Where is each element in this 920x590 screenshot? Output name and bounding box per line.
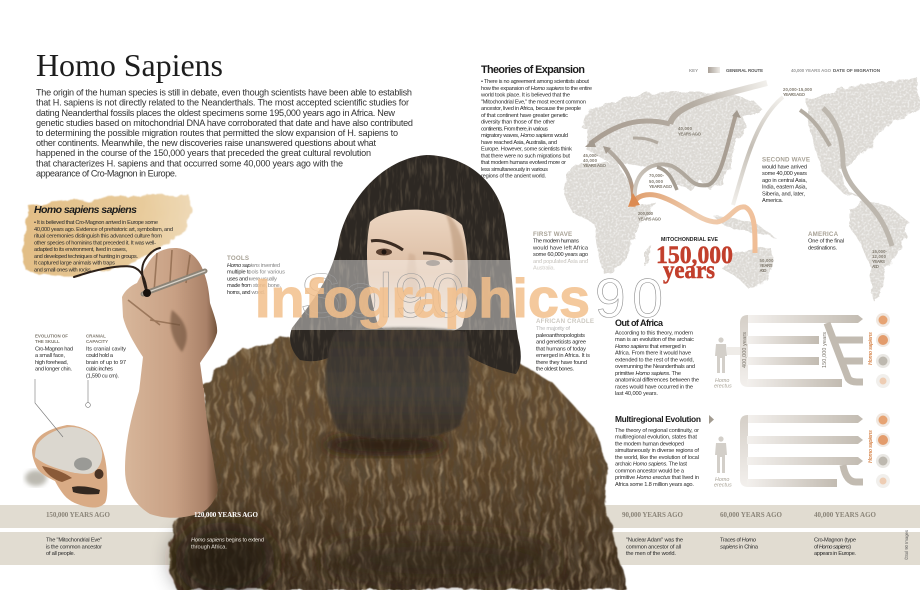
text: evolution of the skull: and longer chin. bbox=[35, 367, 72, 373]
text: african cradle: that humans of today bbox=[536, 346, 586, 352]
text: theories of expansion: continents. From there, in various bbox=[481, 126, 548, 132]
text: theories of expansion: world took place. It is believed that the bbox=[480, 92, 570, 98]
intro text: to determining the possible migration routes that permitted the slow expansion of H. sapiens to bbox=[36, 128, 398, 138]
intro text bbox=[36, 88, 413, 178]
callout: mitochondrial eve: 150,000 bbox=[656, 242, 733, 269]
text: second wave: America. bbox=[762, 198, 783, 204]
panel: homo sapiens sapiens: Homo sapiens sapiens bbox=[34, 204, 137, 216]
hand bbox=[122, 248, 217, 392]
timeline: is the common ancestor bbox=[46, 544, 102, 550]
text: tools: TOOLS bbox=[227, 255, 249, 262]
intro text: that characterizes H. sapiens and that occurred some 40,000 years ago with the bbox=[36, 158, 343, 168]
forearm bbox=[125, 388, 218, 518]
eyes and brows bbox=[371, 240, 452, 297]
text: cranial capacity: Its cranial cavity bbox=[86, 346, 126, 352]
map date labels: AGO bbox=[760, 268, 767, 273]
text: first wave bbox=[532, 231, 589, 272]
text: theories of expansion: migratory waves, Homo sapiens would bbox=[481, 133, 568, 139]
illustration: skull bbox=[25, 425, 107, 508]
icon: arrow bbox=[709, 415, 714, 424]
text: cranial capacity bbox=[86, 334, 126, 380]
icon: homo erectus figure bbox=[715, 337, 727, 373]
text: cranial capacity: CAPACITY bbox=[86, 339, 108, 344]
text: out of africa: last 40,000 years. bbox=[615, 391, 658, 397]
text: tools bbox=[227, 255, 285, 296]
map continents bbox=[563, 77, 920, 300]
text: america: One of the final bbox=[808, 238, 844, 244]
text: america: AMERICA bbox=[808, 231, 839, 238]
map date labels: 200,000 bbox=[638, 211, 654, 216]
map date labels: 40,000 bbox=[583, 158, 598, 163]
map date labels: YEARS bbox=[872, 259, 885, 264]
text: theories of expansion: "Mitochondrial Eve," the most recent common bbox=[481, 99, 586, 105]
map date labels: 40,000 bbox=[678, 126, 693, 131]
text: america: destinations. bbox=[808, 245, 837, 251]
credit: ©Sol 90 Images bbox=[904, 530, 909, 560]
map date labels: YEARS AGO bbox=[783, 92, 806, 97]
text: second wave: ago in central Asia, bbox=[762, 178, 807, 184]
map key: GENERAL ROUTE bbox=[726, 68, 763, 73]
text: evolution of the skull bbox=[35, 334, 73, 373]
skull leader lines bbox=[35, 379, 90, 437]
text: out of africa: Africa. From there it would have bbox=[615, 351, 691, 357]
text: out of africa: Homo sapiens that emerged in bbox=[615, 344, 686, 350]
map key: KEY bbox=[689, 68, 698, 73]
text: second wave: some 40,000 years bbox=[762, 171, 807, 177]
heading: out of africa: Out of Africa bbox=[615, 318, 664, 328]
text: multiregional evolution: the modern human developed bbox=[615, 442, 684, 448]
text: tools: Homo sapiens invented bbox=[227, 263, 280, 269]
fur shadows bbox=[175, 434, 560, 590]
panel: homo sapiens sapiens: and small ones with rocks. bbox=[34, 267, 92, 273]
text: african cradle: paleoanthropologists bbox=[536, 333, 585, 339]
text: cranial capacity: (1,590 cu cm). bbox=[86, 374, 119, 380]
text: theories of expansion: that there were no such migrations but bbox=[481, 153, 570, 159]
intro text: The origin of the human species is still in debate, even though scientists have been able to establish bbox=[36, 88, 412, 98]
text: theories of expansion: of that continent have greater genetic bbox=[481, 113, 568, 119]
text: african cradle: and geneticists agree bbox=[536, 340, 586, 346]
timeline: 150,000 YEARS AGO bbox=[46, 511, 111, 519]
text: cranial capacity: cubic inches bbox=[86, 367, 113, 373]
timeline bbox=[46, 511, 877, 557]
timeline: sapiens in China bbox=[720, 544, 759, 550]
panel: homo sapiens sapiens: and developed techniques of hunting in groups. bbox=[34, 254, 138, 260]
timeline: of Homo sapiens) bbox=[814, 544, 851, 550]
timeline bands bbox=[0, 505, 920, 565]
intro text: other continents. Meanwhile, the new discoveries raise unanswered questions about what bbox=[36, 138, 376, 148]
text: multiregional evolution: simultaneously in diverse regions of bbox=[615, 448, 699, 454]
text: theories of expansion: how the expansion of Homo sapiens to the entire bbox=[481, 86, 592, 92]
intro text: that H. sapiens is not directly related to the Neanderthals. The most accepted scientific studies for bbox=[36, 98, 409, 108]
watermark: Sol90 bbox=[300, 262, 465, 331]
timeline: 60,000 YEARS AGO bbox=[720, 511, 783, 519]
timeline: The "Mitochondrial Eve" bbox=[46, 538, 102, 544]
timeline: 90,000 YEARS AGO bbox=[622, 511, 684, 519]
illustration: cro-magnon man bbox=[74, 155, 627, 590]
timeline: of all people. bbox=[46, 551, 75, 557]
intro text: appearance of Cro-Magnon in Europe. bbox=[36, 168, 177, 178]
text: african cradle: the oldest bones. bbox=[536, 366, 574, 372]
text: cranial capacity: brain of up to 97 bbox=[86, 360, 126, 366]
text: out of africa: man is an evolution of the archaic bbox=[615, 337, 694, 343]
map date labels: 15,000- bbox=[872, 249, 888, 254]
text: tools: uses and were usually bbox=[227, 276, 277, 282]
text: out of africa: primitive Homo sapiens. The bbox=[615, 371, 681, 377]
text: theories of expansion: diversity than those of the other bbox=[481, 120, 555, 126]
map date labels: AGO bbox=[872, 264, 880, 269]
text: second wave: would have arrived bbox=[761, 164, 807, 170]
timeline: appears in Europe. bbox=[814, 551, 856, 557]
panel: homo sapiens sapiens bbox=[24, 195, 191, 276]
text: first wave: some 60,000 years ago bbox=[533, 252, 588, 258]
text: tools: multiple tools for various bbox=[227, 270, 285, 276]
text: theories of expansion: • There is no agreement among scientists about bbox=[481, 79, 589, 85]
text: evolution of the skull: EVOLUTION OF bbox=[35, 334, 68, 338]
icon: world region globes bbox=[876, 413, 890, 488]
map date labels: 45,000- bbox=[583, 153, 599, 158]
heading: theories of expansion: Theories of Expansion bbox=[481, 64, 585, 76]
intro text: genetic studies based on mitochondrial DNA have corroborated that date and have also contributed bbox=[36, 118, 413, 128]
text: out of africa: races would have occurred in the bbox=[615, 384, 693, 390]
text: second wave: Siberia, and, later, bbox=[762, 192, 805, 198]
panel: homo sapiens sapiens: adapted to its environment, lived in caves, bbox=[34, 247, 127, 253]
text: multiregional evolution: primitive Homo erectus that lived in bbox=[615, 475, 699, 481]
intro text: happened in the course of the 150,000 years that preceded the great cultural revolution bbox=[36, 148, 371, 158]
text: african cradle: there they have found bbox=[536, 360, 587, 366]
timeline: Homo sapiens begins to extend bbox=[191, 538, 264, 544]
intro text: dating Neanderthal fossils places the oldest specimens some 195,000 years ago in Africa. New bbox=[36, 108, 395, 118]
text: tools: made from stone, bone, bbox=[227, 283, 281, 289]
text: second wave: SECOND WAVE bbox=[762, 156, 810, 164]
map date labels: YEARS AGO bbox=[678, 132, 702, 136]
timeline: 40,000 YEARS AGO bbox=[814, 511, 877, 519]
panel: homo sapiens sapiens: ritual ceremonies distinguish this advanced culture from bbox=[34, 234, 162, 240]
callout: mitochondrial eve: years bbox=[663, 257, 715, 284]
chart: out of africa tree bbox=[714, 313, 890, 390]
hair bbox=[290, 155, 521, 374]
timeline: "Nuclear Adam" was the bbox=[626, 538, 683, 544]
panel: homo sapiens sapiens: • It is believed that Cro-Magnon arrived in Europe some bbox=[34, 220, 158, 226]
panel: homo sapiens sapiens: It captured large animals with traps bbox=[34, 260, 115, 266]
text: african cradle: The majority of bbox=[536, 326, 570, 332]
beard bbox=[326, 328, 469, 439]
callout: mitochondrial eve: MITOCHONDRIAL EVE bbox=[661, 237, 719, 243]
icon: world region globes bbox=[876, 313, 890, 388]
heading: multiregional evolution: Multiregional Evolution bbox=[615, 414, 701, 424]
body fur bbox=[168, 336, 627, 590]
map date labels: 50,000 bbox=[649, 179, 664, 184]
text: theories of expansion: Europe. However, some scientists think bbox=[481, 146, 572, 152]
text: theories of expansion: ancestor, lived in Africa, because the people bbox=[481, 106, 581, 112]
icon: homo erectus figure bbox=[715, 436, 727, 473]
text: tools: horns, and wood. bbox=[227, 290, 265, 296]
callout: mitochondrial eve bbox=[656, 237, 733, 284]
face shading bbox=[445, 212, 467, 300]
text: first wave: Australia. bbox=[533, 266, 555, 272]
timeline: Traces of Homo bbox=[720, 538, 756, 544]
map key: 40,000 YEARS AGO bbox=[791, 68, 832, 73]
text: african cradle bbox=[536, 318, 594, 372]
map routes bbox=[585, 83, 892, 253]
panel: world map bbox=[563, 77, 920, 300]
text: theories of expansion bbox=[480, 79, 592, 180]
text: multiregional evolution: multiregional evolution, states that bbox=[615, 435, 697, 441]
text: theories of expansion: less simultaneously in various bbox=[481, 167, 548, 173]
chart: multiregional tree: Homo sapiens bbox=[868, 430, 874, 463]
chart: out of africa tree: erectus bbox=[714, 384, 732, 390]
text: first wave: would have left Africa bbox=[532, 245, 589, 251]
text: theories of expansion: regions of the ancient world. bbox=[481, 174, 546, 180]
watermark: 90 bbox=[595, 267, 663, 329]
chart: multiregional tree bbox=[714, 413, 890, 488]
map date labels: 50,000 bbox=[760, 258, 774, 263]
text: first wave: The modern humans bbox=[533, 238, 579, 244]
text: african cradle: emerged in Africa. It is bbox=[536, 353, 590, 359]
text: second wave bbox=[761, 156, 810, 204]
text: theories of expansion: that modern humans evolved more or bbox=[481, 160, 566, 166]
stone tool and cord bbox=[74, 248, 205, 297]
text: out of africa: anatomical differences between the bbox=[615, 378, 699, 384]
text: multiregional evolution: archaic Homo sapiens. The last bbox=[615, 462, 687, 468]
map key bbox=[689, 67, 880, 73]
chart: multiregional tree: Homo bbox=[715, 477, 729, 483]
text: out of africa: According to this theory, modern bbox=[615, 330, 693, 336]
map date labels: YEARS AGO bbox=[583, 163, 607, 168]
timeline: Cro-Magnon (type bbox=[814, 538, 856, 544]
map key: DATE OF MIGRATION bbox=[833, 68, 880, 73]
map date labels bbox=[583, 87, 888, 273]
text: cranial capacity: could hold a bbox=[86, 353, 114, 359]
text: out of africa: overrunning the Neanderthals and bbox=[615, 364, 695, 370]
face bbox=[367, 210, 468, 336]
text: multiregional evolution: The theory of regional continuity, or bbox=[615, 428, 699, 434]
text: african cradle: AFRICAN CRADLE bbox=[536, 318, 594, 325]
timeline: common ancestor of all bbox=[626, 544, 681, 550]
timeline: the men of the world. bbox=[626, 551, 676, 557]
chart: out of africa tree: Homo bbox=[715, 378, 729, 384]
chart: out of africa tree: Homo sapiens bbox=[868, 332, 874, 365]
timeline: 120,000 YEARS AGO bbox=[194, 511, 259, 519]
panel: homo sapiens sapiens: other species of hominins that preceded it. It was well- bbox=[34, 240, 156, 246]
text: evolution of the skull: a small face, bbox=[35, 353, 65, 359]
text: america bbox=[808, 231, 844, 251]
text: multiregional evolution bbox=[615, 428, 699, 488]
text: multiregional evolution: common ancestor would be a bbox=[615, 468, 685, 474]
map date labels: 12,000 bbox=[872, 254, 887, 259]
map date labels: YEARS AGO bbox=[638, 216, 662, 222]
map date labels: YEARS bbox=[760, 263, 773, 268]
text: cranial capacity: CRANIAL bbox=[86, 334, 106, 338]
chart: multiregional tree: erectus bbox=[714, 482, 732, 488]
text: second wave: India, eastern Asia, bbox=[762, 185, 807, 191]
text: evolution of the skull: THE SKULL bbox=[35, 339, 60, 344]
map date labels: 70,000- bbox=[649, 173, 665, 178]
title: Homo Sapiens bbox=[36, 47, 223, 83]
text: evolution of the skull: high forehead, bbox=[35, 360, 68, 366]
text: theories of expansion: have reached Asia, Australia, and bbox=[481, 140, 557, 146]
panel: homo sapiens sapiens: 40,000 years ago. Evidence of prehistoric art, symbolism, and bbox=[34, 227, 173, 233]
text: evolution of the skull: Cro-Magnon had bbox=[35, 346, 73, 352]
map date labels: 20,000-15,000 bbox=[783, 87, 813, 92]
timeline: through Africa. bbox=[191, 544, 227, 550]
text: first wave: and populated Asia and bbox=[533, 259, 588, 265]
text: first wave: FIRST WAVE bbox=[533, 231, 572, 238]
chart: out of africa tree: 150,000 years bbox=[822, 332, 828, 368]
map date labels: YEARS AGO bbox=[649, 184, 673, 189]
text: multiregional evolution: Africa some 1.8 million years ago. bbox=[615, 482, 694, 488]
watermark: Infographics bbox=[255, 267, 590, 329]
text: out of africa bbox=[615, 330, 699, 397]
watermark bbox=[250, 260, 663, 331]
text: multiregional evolution: the world, like the evolution of local bbox=[615, 455, 699, 461]
text: out of africa: extended to the rest of the world, bbox=[615, 358, 694, 364]
chart: out of africa tree: 400,000 years bbox=[742, 332, 748, 368]
